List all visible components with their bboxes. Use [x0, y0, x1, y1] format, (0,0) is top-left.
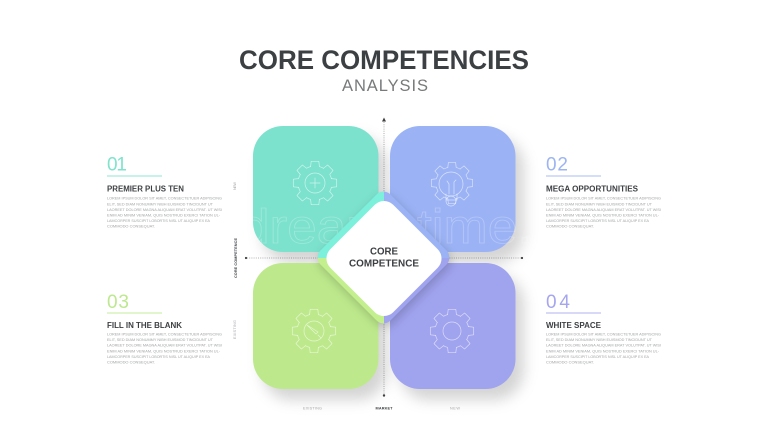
panel: 04 white space — [546, 292, 661, 364]
panel: 03 fill in the blank: LAOREET DOLORE MAGNA ALIQUAM ERAT VOLUTPAT. UT WISI — [107, 343, 222, 348]
panel: bottom-right purple card — [390, 263, 516, 389]
panel: 04 white space: LOREM IPSUM DOLOR SIT AMET, CONSECTETUER ADIPISCING — [546, 332, 661, 336]
icon: gear with compass needle — [292, 309, 336, 353]
panel: 01 premier plus ten: LAMCORPER SUSCIPIT LOBORTIS NISL UT ALIQUIP EX EA — [107, 218, 210, 223]
panel: 02 mega opportunities: LOREM IPSUM DOLOR SIT AMET, CONSECTETUER ADIPISCING — [546, 196, 661, 201]
axis labels: horizontal — [303, 406, 460, 410]
panel: 02 mega opportunities: MEGA OPPORTUNITIES — [546, 184, 639, 194]
subtitle: ANALYSIS — [342, 77, 428, 95]
panel: 03 fill in the blank: LOREM IPSUM DOLOR SIT AMET, CONSECTETUER ADIPISCING — [107, 332, 222, 336]
panel: 04 white space: 04 — [546, 292, 570, 313]
axis labels: horizontal: NEW — [450, 406, 460, 410]
panel: 04 white space: ELIT, SED DIAM NONUMMY NIBH EUISMOD TINCIDUNT UT — [546, 337, 653, 342]
card shadows — [262, 137, 524, 400]
vertical axis: market — [382, 118, 386, 397]
axis labels: vertical: NEW — [233, 182, 237, 190]
panel: 02 mega opportunities: ELIT, SED DIAM NONUMMY NIBH EUISMOD TINCIDUNT UT — [546, 201, 653, 206]
axis labels: horizontal: EXISTING — [303, 406, 322, 410]
panel: 03 fill in the blank: LAMCORPER SUSCIPIT LOBORTIS NISL UT ALIQUIP EX EA — [107, 354, 210, 359]
panel: 02 mega opportunities: LAOREET DOLORE MAGNA ALIQUAM ERAT VOLUTPAT. UT WISI — [546, 207, 661, 212]
panel: 04 white space: ENIM AD MINIM VENIAM, QUIS NOSTRUD EXERCI TATION UL- — [546, 348, 660, 353]
watermark: dreamstime. — [240, 201, 532, 254]
horizontal axis: core competence — [245, 257, 523, 259]
panel: 03 fill in the blank: ENIM AD MINIM VENIAM, QUIS NOSTRUD EXERCI TATION UL- — [107, 348, 221, 353]
axis labels: vertical — [233, 182, 238, 339]
panel: 01 premier plus ten: COMMODO CONSEQUAT. — [107, 224, 155, 229]
panel: 03 fill in the blank: 03 — [107, 292, 129, 313]
panel: 01 premier plus ten: LOREM IPSUM DOLOR SIT AMET, CONSECTETUER ADIPISCING — [107, 196, 222, 201]
panel: 03 fill in the blank: FILL IN THE BLANK — [107, 321, 182, 330]
panel: 04 white space: LAMCORPER SUSCIPIT LOBORTIS NISL UT ALIQUIP EX EA — [546, 354, 649, 359]
panel: 01 premier plus ten — [107, 154, 222, 229]
panel: top-left teal card — [253, 126, 378, 252]
central diamond — [313, 187, 455, 331]
panel: 03 fill in the blank — [107, 292, 222, 364]
central diamond: CORE — [370, 246, 398, 258]
panel: 02 mega opportunities: COMMODO CONSEQUAT. — [546, 224, 594, 229]
panel: 04 white space: COMMODO CONSEQUAT. — [546, 360, 594, 364]
panel: 02 mega opportunities — [546, 154, 661, 229]
panel: 03 fill in the blank: COMMODO CONSEQUAT. — [107, 360, 155, 364]
panel: 01 premier plus ten: 01 — [107, 154, 127, 176]
panel: 01 premier plus ten: LAOREET DOLORE MAGNA ALIQUAM ERAT VOLUTPAT. UT WISI — [107, 207, 222, 212]
axis labels: vertical: CORE COMPETENCE — [234, 238, 238, 278]
panel: 02 mega opportunities: LAMCORPER SUSCIPIT LOBORTIS NISL UT ALIQUIP EX EA — [546, 218, 649, 223]
panel: 03 fill in the blank: ELIT, SED DIAM NONUMMY NIBH EUISMOD TINCIDUNT UT — [107, 337, 214, 342]
icon: plain gear — [430, 309, 474, 353]
panel: 02 mega opportunities: ENIM AD MINIM VENIAM, QUIS NOSTRUD EXERCI TATION UL- — [546, 212, 660, 218]
panel: 01 premier plus ten: ENIM AD MINIM VENIAM, QUIS NOSTRUD EXERCI TATION UL- — [107, 212, 221, 218]
panel: 04 white space: WHITE SPACE — [546, 321, 602, 330]
panel: 01 premier plus ten: ELIT, SED DIAM NONUMMY NIBH EUISMOD TINCIDUNT UT — [107, 201, 214, 206]
panel: 01 premier plus ten: PREMIER PLUS TEN — [107, 184, 184, 194]
axis labels: horizontal: MARKET — [376, 406, 393, 410]
title: CORE COMPETENCIES — [239, 45, 529, 75]
panel: bottom-left green card — [253, 263, 378, 389]
panel: top-right blue card — [390, 126, 516, 252]
central diamond: COMPETENCE — [349, 258, 419, 270]
axis labels: vertical: EXISTING — [233, 320, 237, 339]
panel: 02 mega opportunities: 02 — [546, 154, 568, 176]
icon: gear with light bulb — [431, 162, 473, 206]
panel: 04 white space: LAOREET DOLORE MAGNA ALIQUAM ERAT VOLUTPAT. UT WISI — [546, 343, 661, 348]
icon: gear with plus — [293, 161, 337, 205]
